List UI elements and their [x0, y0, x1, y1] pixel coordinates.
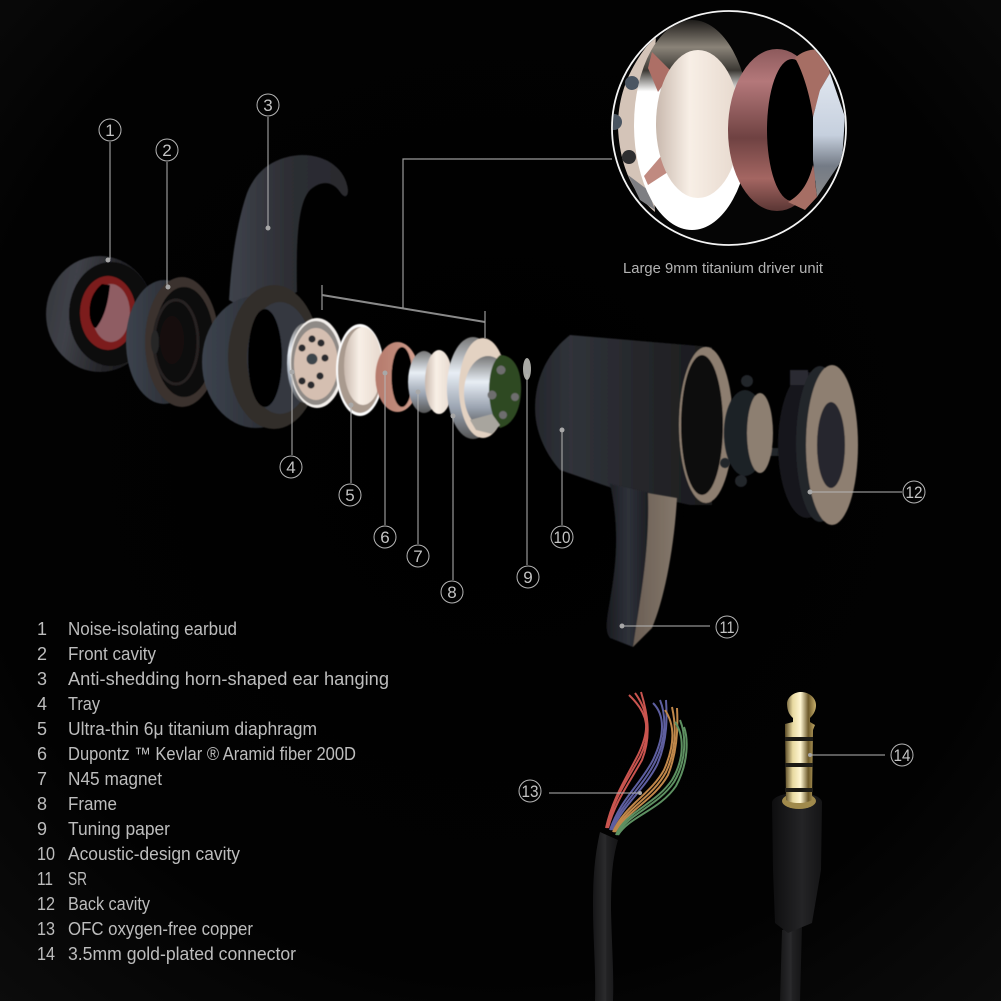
cable 13 with wires: [593, 692, 687, 1001]
numbered callout badges: [99, 94, 925, 802]
parts legend: [37, 619, 389, 964]
parts legend: Tuning paper: [68, 819, 170, 839]
parts legend: N45 magnet: [68, 769, 162, 789]
callout badge numbers: 5: [345, 486, 355, 505]
callout leaders: [110, 117, 902, 793]
parts legend: 2: [37, 644, 47, 664]
callout badge numbers: 4: [286, 458, 296, 477]
parts legend: 9: [37, 819, 47, 839]
parts legend: Tray: [68, 694, 100, 714]
parts legend: 14: [37, 944, 55, 964]
callout badge numbers: 12: [906, 483, 922, 502]
callout badge numbers: [105, 96, 922, 801]
callout badge numbers: 8: [447, 583, 457, 602]
inner copper wall: [795, 50, 830, 117]
callout badge numbers: 14: [894, 746, 910, 765]
parts legend: 12: [37, 894, 55, 914]
callout dots: [106, 226, 812, 795]
silver ring: [813, 73, 845, 197]
ear hook ring: [202, 296, 310, 428]
pink reflections: [648, 52, 670, 92]
sheath: [772, 793, 822, 933]
part 3: horn-shaped ear hanging: [202, 155, 348, 429]
part 4: tray: [287, 318, 344, 408]
callout badge numbers: 3: [263, 96, 273, 115]
plug insulation rings: [785, 737, 813, 792]
tray detail: [618, 35, 656, 212]
parts legend: 5: [37, 719, 47, 739]
part 7: N45 magnet: [408, 350, 453, 414]
green wires: [616, 720, 687, 835]
part 1: noise-isolating earbud: [46, 256, 154, 372]
part 12: back cavity: [778, 365, 858, 525]
parts legend: 6: [37, 744, 47, 764]
parts legend: 4: [37, 694, 47, 714]
parts legend: 3.5mm gold-plated connector: [68, 944, 296, 964]
callout badge numbers: 1: [105, 121, 115, 140]
part 8: frame: [447, 337, 521, 439]
parts legend: Acoustic-design cavity: [68, 844, 240, 864]
white ring: [634, 20, 750, 230]
cream diaphragm: [656, 50, 740, 198]
part 6: kevlar aramid fiber coil: [376, 342, 420, 412]
ear hook horn: [229, 155, 348, 312]
part 5: titanium diaphragm: [336, 324, 384, 416]
callout badge numbers: 11: [720, 618, 734, 637]
parts legend: 10: [37, 844, 55, 864]
back cavity connector cap: [720, 375, 785, 487]
parts legend: SR: [68, 869, 87, 889]
flat cable: [780, 925, 802, 1001]
parts legend: 13: [37, 919, 55, 939]
part 11: SR strain relief: [607, 484, 677, 647]
parts legend: 11: [37, 869, 53, 889]
part 10: acoustic-design cavity: [535, 335, 733, 505]
callout badge numbers: 13: [522, 782, 538, 801]
callout badge numbers: 10: [554, 528, 570, 547]
callout badge numbers: 2: [162, 141, 172, 160]
copper coil: [728, 49, 826, 211]
callout badge numbers: 6: [380, 528, 390, 547]
part 2: front cavity: [126, 277, 219, 407]
parts legend: Dupontz ™ Kevlar ® Aramid fiber 200D: [68, 744, 356, 764]
parts legend: Noise-isolating earbud: [68, 619, 237, 639]
flat cable: [593, 832, 618, 1001]
parts legend: Frame: [68, 794, 117, 814]
inset caption: Large 9mm titanium driver unit: [623, 260, 824, 277]
plug collar: [782, 793, 816, 809]
blue wires: [610, 700, 667, 830]
callout badge numbers: 9: [523, 568, 533, 587]
parts legend: Front cavity: [68, 644, 156, 664]
callout badge numbers: 7: [413, 547, 423, 566]
jack connector 14: [772, 692, 822, 1001]
red wires: [606, 692, 648, 828]
parts legend: Ultra-thin 6μ titanium diaphragm: [68, 719, 317, 739]
parts legend: 1: [37, 619, 47, 639]
inset: large 9mm titanium driver unit: [606, 11, 846, 245]
parts legend: 3: [37, 669, 47, 689]
gold plug: [785, 692, 816, 803]
parts legend: 8: [37, 794, 47, 814]
driver bracket leader: [322, 159, 612, 338]
parts legend: OFC oxygen-free copper: [68, 919, 253, 939]
orange wires: [613, 707, 677, 832]
parts legend: Back cavity: [68, 894, 150, 914]
part 9: tuning paper: [523, 358, 531, 380]
green circuit board: [489, 355, 521, 428]
parts legend: 7: [37, 769, 47, 789]
parts legend: Anti-shedding horn-shaped ear hanging: [68, 669, 389, 689]
